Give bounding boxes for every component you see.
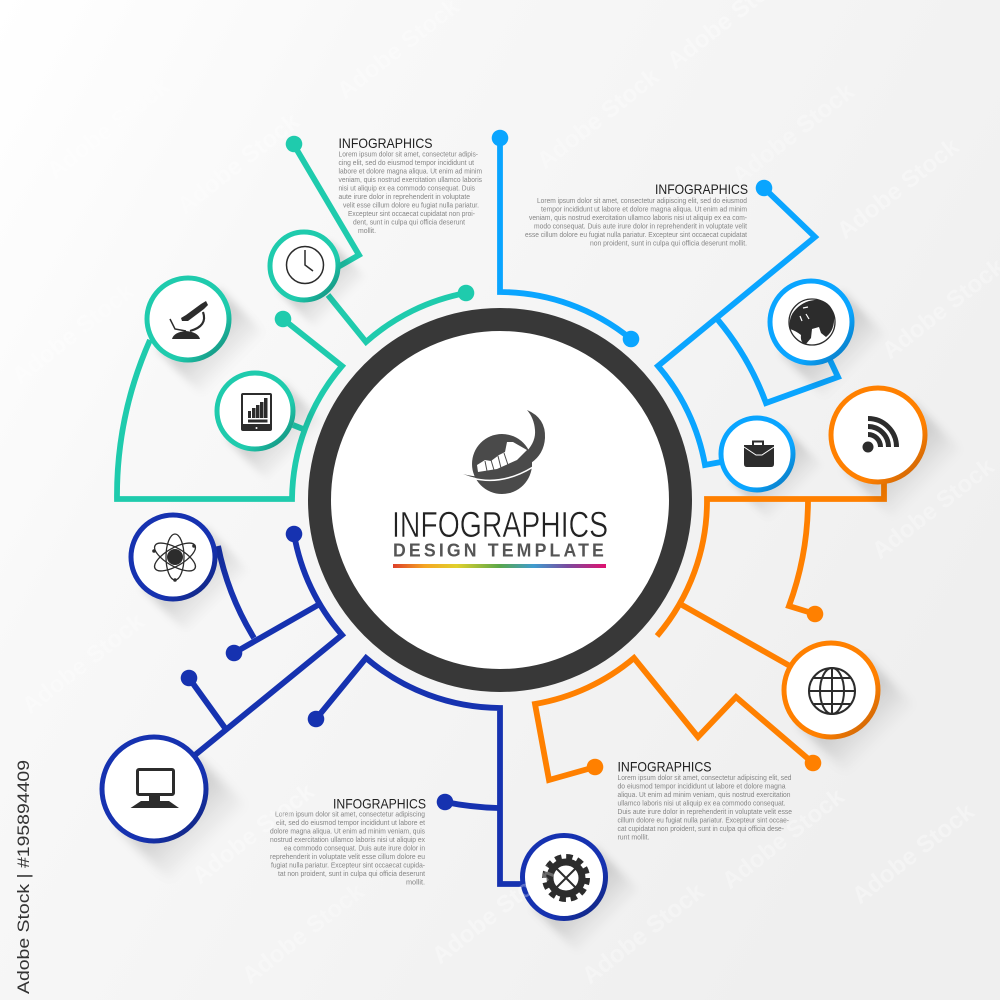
text block: navy: ea commodo consequat. Duis aute irure dolor in <box>284 844 425 852</box>
text block: navy: fugiat nulla pariatur. Excepteur sint occaecat cupida- <box>271 860 425 870</box>
text: Adobe Stock <box>867 453 1000 565</box>
text block: navy: Lorem ipsum dolor sit amet, consectetur adipiscing <box>275 810 425 818</box>
text block: blue: Lorem ipsum dolor sit amet, consectetur adipiscing elit, sed do eiusmod <box>537 196 747 205</box>
text block: orange: do eiusmod tempor incididunt ut labore et dolore magna <box>618 782 786 790</box>
text block: navy: nostrud exercitation ullamco laboris nisi ut aliquip ex <box>270 835 425 844</box>
text block: orange: cillum dolore eu fugiat nulla pariatur. Excepteur sint occae- <box>618 816 789 824</box>
text block: blue: veniam, quis nostrud exercitation ullamco laboris nisi ut aliquip ex ea com- <box>529 213 747 222</box>
panel: teal <box>117 135 482 499</box>
text: Adobe Stock <box>172 108 305 220</box>
text block: orange: cat cupidatat non proident, sunt in culpa qui officia dese- <box>618 824 784 833</box>
text block: teal: nisi ut aliquip ex ea commodo consequat. Duis <box>338 184 475 192</box>
text block: teal: labore et dolore magna aliqua. Ut enim ad minim <box>338 166 482 176</box>
text block: orange: aliqua. Ut enim ad minim veniam, quis nostrud exercitation <box>618 790 790 799</box>
text: Adobe Stock <box>717 783 850 895</box>
text block: teal: aute irure dolor in reprehenderit in voluptate <box>338 192 470 201</box>
text block: navy: mollit. <box>406 878 425 886</box>
stock id side label: Adobe Stock | #195894409 <box>14 760 33 994</box>
text block: teal: cing elit, sed do eiusmod tempor incididunt ut <box>338 158 474 167</box>
text block: teal: velit esse cillum dolore eu fugiat nulla pariatur. <box>343 200 479 210</box>
text block: orange: Lorem ipsum dolor sit amet, consectetur adipiscing elit, sed <box>618 773 792 782</box>
text block: navy <box>270 796 426 886</box>
text block: teal: Lorem ipsum dolor sit amet, consectetur adipis- <box>338 150 478 158</box>
text: Adobe Stock <box>17 608 150 720</box>
text block: orange: Duis aute irure dolor in reprehenderit in voluptate velit esse <box>618 807 792 816</box>
text block: orange <box>618 758 792 842</box>
text block: navy: elit, sed do eiusmod tempor incididunt ut labore et <box>276 818 425 827</box>
subtitle: DESIGN TEMPLATE <box>393 540 607 560</box>
logo mark <box>463 410 545 494</box>
text: Adobe Stock <box>847 798 980 910</box>
icon circle: computer <box>102 737 247 882</box>
text block: orange: INFOGRAPHICS <box>618 758 712 774</box>
icon circle: briefcase <box>721 418 823 520</box>
text: Adobe Stock <box>832 133 965 245</box>
text block: teal: dent, sunt in culpa qui officia deserunt <box>353 218 465 226</box>
icon circle: clock <box>270 232 366 328</box>
text block: blue <box>525 181 748 248</box>
text: Adobe Stock <box>427 858 560 970</box>
panel: blue <box>492 130 887 520</box>
text block: teal: INFOGRAPHICS <box>338 135 432 151</box>
icon circle: atom <box>131 515 249 633</box>
panel: orange <box>535 388 962 842</box>
text: Adobe Stock <box>727 78 860 190</box>
text block: blue: esse cillum dolore eu fugiat nulla pariatur. Excepteur sint occaecat cupidatat <box>525 230 747 239</box>
text block: teal: veniam, quis nostrud exercitation ullamco laboris <box>338 175 482 184</box>
icon circle: wire globe <box>784 643 915 774</box>
text block: blue: non proident, sunt in culpa qui officia deserunt mollit. <box>590 238 747 248</box>
text block: teal <box>338 135 482 235</box>
main title: INFOGRAPHICS <box>392 504 608 545</box>
navy connector lines <box>181 526 522 884</box>
icon circle: gear <box>522 836 640 953</box>
text block: navy: dolore magna aliqua. Ut enim ad minim veniam, quis <box>270 826 425 836</box>
blue connector lines <box>492 130 838 465</box>
panel: navy <box>102 515 640 953</box>
icon circle: microscope <box>147 278 264 395</box>
text block: teal: mollit. <box>358 226 376 235</box>
text block: blue: tempor incididunt ut labore et dolore magna aliqua. Ut enim ad minim <box>541 204 747 214</box>
text: Adobe Stock <box>237 878 370 990</box>
text block: orange: runt mollit. <box>618 832 650 842</box>
text: Adobe Stock <box>577 878 710 990</box>
central hub <box>320 320 680 680</box>
text: Adobe Stock <box>7 278 140 390</box>
text: Adobe Stock <box>532 63 665 175</box>
orange connector lines <box>535 482 884 780</box>
text block: navy: tat non proident, sunt in culpa qui officia deserunt <box>278 869 425 878</box>
text block: teal: Excepteur sint occaecat cupidatat non proi- <box>348 209 475 218</box>
icon circle: tablet <box>217 373 325 481</box>
text: Adobe Stock <box>42 73 175 185</box>
teal connector lines <box>117 136 474 499</box>
text block: blue: modo consequat. Duis aute irure dolor in reprehenderit in voluptate velit <box>534 222 747 230</box>
text block: navy: INFOGRAPHICS <box>333 796 426 812</box>
icon circle: rss <box>831 388 962 519</box>
rainbow bar <box>393 564 606 568</box>
text block: blue: INFOGRAPHICS <box>655 181 748 197</box>
text block: orange: ullamco laboris nisi ut aliquip ex ea commodo consequat. <box>618 798 786 808</box>
text: Adobe Stock <box>187 778 320 890</box>
text block: navy: reprehenderit in voluptate velit esse cillum dolore eu <box>270 852 425 861</box>
icon circle: earth <box>770 281 887 398</box>
